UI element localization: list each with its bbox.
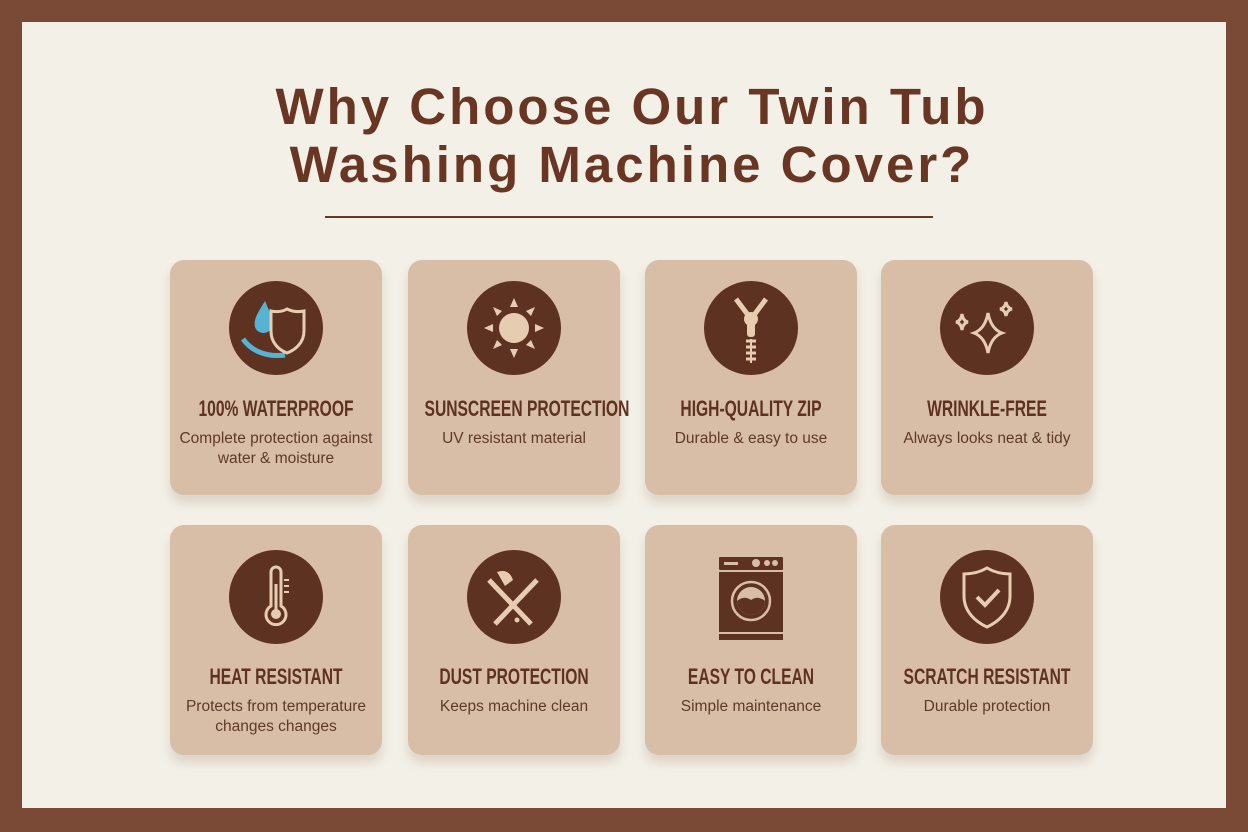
card: heat resistant: changes changes [215, 718, 337, 735]
card: wrinkle-free [881, 260, 1093, 495]
title: Why Choose Our Twin Tub [275, 78, 989, 135]
card: scratch resistant [881, 525, 1093, 755]
card: heat resistant: HEAT RESISTANT [209, 664, 343, 689]
icon: crossed dust [467, 550, 561, 644]
icon: sparkles [940, 281, 1034, 375]
icon: shield check [940, 550, 1034, 644]
card: zip: Durable & easy to use [675, 430, 827, 447]
card: easy to clean: Simple maintenance [681, 698, 821, 715]
card: sunscreen [408, 260, 620, 495]
icon: thermometer [229, 550, 323, 644]
card: dust [408, 525, 620, 755]
icon: sun [467, 281, 561, 375]
card: 100% waterproof: 100% WATERPROOF [198, 396, 354, 421]
card: easy to clean [645, 525, 857, 755]
card: sunscreen: SUNSCREEN PROTECTION [425, 396, 629, 421]
card: wrinkle-free: WRINKLE-FREE [927, 396, 1047, 421]
card: dust: DUST PROTECTION [439, 664, 589, 689]
title: Washing Machine Cover? [290, 136, 974, 193]
card: dust: Keeps machine clean [440, 698, 588, 715]
icon: water drop shield [229, 281, 323, 375]
card: scratch resistant: Durable protection [924, 698, 1050, 715]
card: heat resistant: Protects from temperature [186, 698, 366, 715]
card: 100% waterproof: Complete protection against [179, 430, 372, 447]
card: zip [645, 260, 857, 495]
icon: washing machine [719, 557, 783, 640]
card: scratch resistant: SCRATCH RESISTANT [904, 664, 1070, 689]
card: heat resistant [170, 525, 382, 755]
card: sunscreen: UV resistant material [442, 430, 586, 447]
card: easy to clean: EASY TO CLEAN [688, 664, 814, 689]
icon: zipper [704, 281, 798, 375]
card: 100% waterproof [170, 260, 382, 495]
card: wrinkle-free: Always looks neat & tidy [903, 430, 1071, 447]
card: 100% waterproof: water & moisture [218, 450, 334, 467]
card: zip: HIGH-QUALITY ZIP [680, 396, 822, 421]
title [275, 78, 989, 193]
